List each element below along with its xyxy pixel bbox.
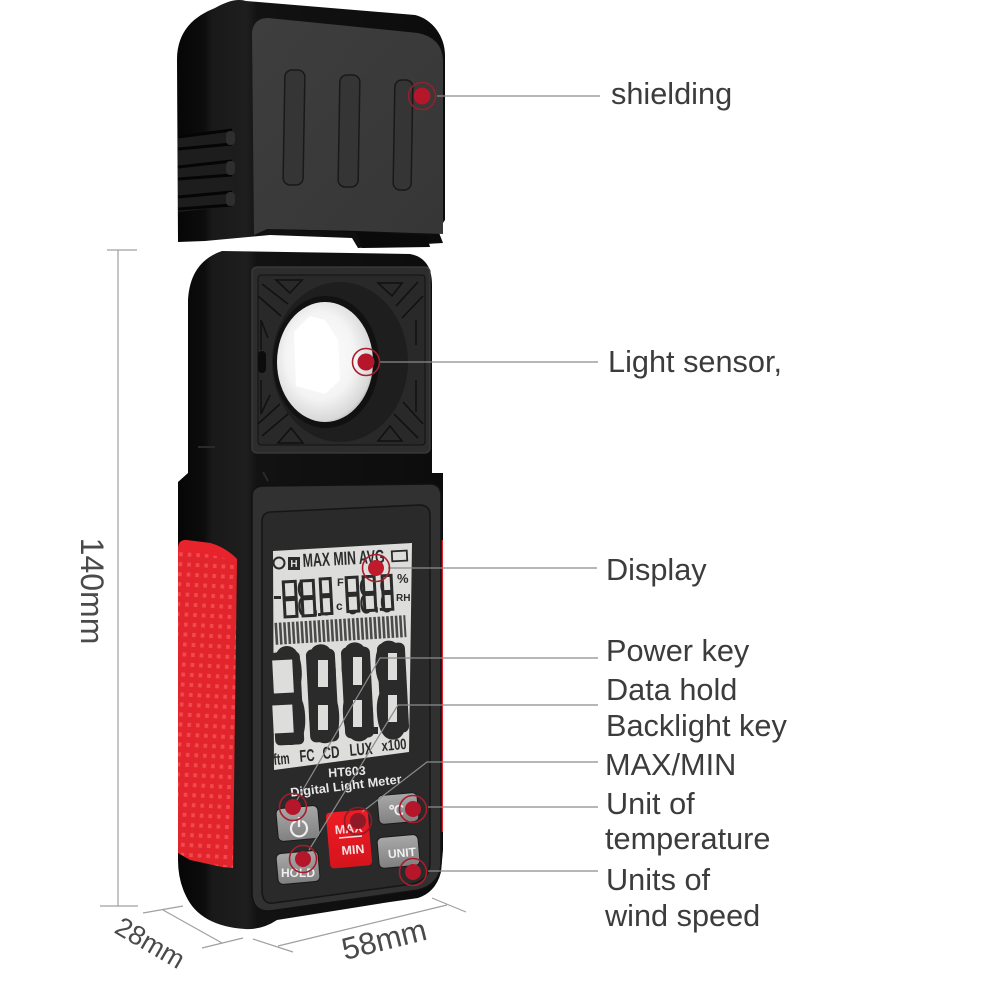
- LCD upper readouts: 88.8: [344, 567, 395, 625]
- marker: light sensor: [352, 348, 380, 376]
- LCD unit row: LUX: [349, 739, 374, 760]
- LCD upper readout segments: [283, 575, 393, 618]
- power button: [276, 805, 320, 842]
- side notch: [258, 351, 266, 373]
- dimension: height: 140mm: [74, 538, 110, 644]
- sensor faceplate: [252, 267, 430, 453]
- UNIT button: [377, 834, 420, 869]
- dimension: depth: [110, 906, 243, 975]
- front panel: [252, 484, 441, 911]
- LCD status row: MAX MIN AVG: [302, 547, 385, 572]
- button caption: HOLD: [281, 866, 315, 880]
- LCD bar graph: [275, 626, 406, 634]
- LCD upper readouts: RH: [396, 593, 410, 604]
- label: MAX/MIN: MAX/MIN: [605, 747, 736, 782]
- cap slot 3: [393, 80, 413, 190]
- MAX/MIN red button: MIN: [341, 842, 365, 858]
- marker: power key: [280, 794, 306, 820]
- LCD unit row: CD: [322, 743, 340, 763]
- cap slot 1: [283, 70, 305, 185]
- LCD unit row: [273, 736, 407, 769]
- cap side ribs: [178, 130, 235, 212]
- marker: MAX/MIN: [344, 808, 372, 834]
- cap slot 2: [338, 75, 360, 187]
- product name: Digital Light Meter: [290, 772, 403, 800]
- label: backlight key: Backlight key: [606, 708, 787, 743]
- faceplate corner ribs: [258, 280, 423, 443]
- label: unit of: Unit of: [606, 786, 695, 821]
- UNIT button: UNIT: [387, 845, 417, 861]
- dimension: width: [253, 898, 466, 967]
- marker: shielding: [408, 82, 436, 110]
- LCD upper readouts: F: [337, 577, 344, 589]
- lens housing ring: [272, 282, 408, 442]
- LCD upper readouts: %: [397, 571, 409, 586]
- label: power key: Power key: [606, 633, 750, 668]
- upper sensor head: [188, 251, 432, 474]
- LCD main readout: [268, 611, 412, 774]
- dimension: depth: 28mm: [110, 911, 190, 975]
- LCD status row: H: [290, 559, 298, 570]
- leader lines: [297, 96, 600, 871]
- label: shielding: shielding: [611, 76, 732, 111]
- LCD upper readouts: 88.8: [281, 569, 335, 629]
- temperature button: ℃: [388, 802, 404, 818]
- backlight button: [276, 850, 320, 885]
- marker: data hold: [290, 846, 316, 872]
- right red strip: [440, 540, 443, 832]
- MAX/MIN red button: [326, 809, 372, 869]
- shielding cap: [177, 0, 445, 248]
- icon: power symbol: [291, 817, 307, 836]
- LCD unit row: x100: [381, 736, 407, 755]
- label: data hold: Data hold: [606, 672, 737, 707]
- LCD unit row: ftm: [273, 751, 290, 769]
- text: 8888: [268, 611, 412, 774]
- LCD status row: [274, 547, 407, 572]
- MAX/MIN red button: MAX: [334, 821, 364, 837]
- label: units of: Units of: [606, 862, 711, 897]
- dimension: width: 58mm: [338, 912, 430, 967]
- lens highlight: [294, 316, 340, 394]
- marker: units of wind speed: [400, 858, 426, 886]
- body seam marks: [198, 447, 268, 481]
- lens dome: [277, 302, 373, 422]
- LCD unit row: FC: [299, 746, 315, 766]
- meter body: [178, 251, 443, 929]
- label: wind speed: wind speed: [604, 898, 760, 933]
- label: display: Display: [606, 552, 707, 587]
- temperature button: [377, 792, 419, 825]
- LCD upper readouts: c: [336, 599, 343, 613]
- lower body: [178, 473, 443, 929]
- marker: display: [362, 554, 390, 582]
- label: temperature: temperature: [605, 821, 770, 856]
- marker: unit of temperature: [400, 796, 426, 822]
- left red grip: [178, 540, 237, 868]
- grip solid top band: [178, 540, 237, 562]
- dimension: height: [74, 250, 138, 906]
- model name: HT603: [328, 764, 366, 780]
- LCD screen: [268, 543, 412, 774]
- label: light sensor: Light sensor,: [608, 344, 782, 379]
